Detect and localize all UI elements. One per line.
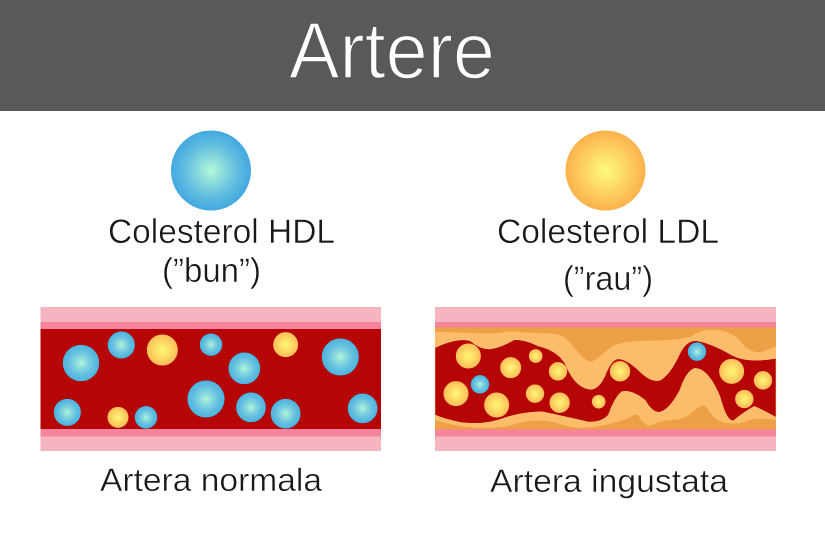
heading: LDL label: Colesterol LDL [497,213,719,251]
panel: narrowed artery [435,307,776,451]
narrowed lumen [435,340,776,423]
title: Artere [289,6,495,95]
icon: LDL cholesterol sphere [566,130,646,210]
header band [0,0,825,111]
heading: HDL label: Colesterol HDL [108,213,335,251]
heading: HDL label: (”bun”) [162,252,261,290]
heading: LDL label [497,213,719,298]
icon: HDL cholesterol sphere [171,130,251,210]
panel: normal artery [40,307,381,451]
caption: narrowed artery: Artera ingustata [490,463,728,499]
heading: LDL label: (”rau”) [563,260,653,298]
caption: normal artery: Artera normala [100,462,322,498]
heading: HDL label [108,213,335,290]
